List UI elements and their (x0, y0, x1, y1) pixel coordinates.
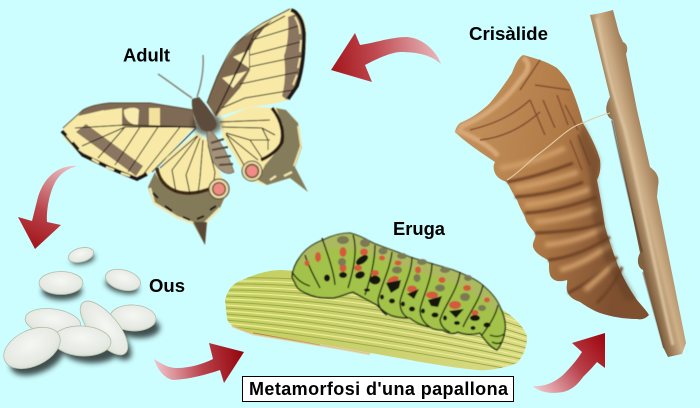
caption text: Metamorfosi d'una papallona (249, 379, 509, 399)
caterpillar grey spots (337, 236, 486, 311)
eggs (0, 245, 161, 382)
leaf (225, 270, 530, 373)
chrysalis cap streaks (470, 60, 590, 170)
egg: back right (109, 304, 157, 332)
egg: upper left (39, 272, 83, 294)
silk thread (507, 113, 610, 180)
egg: centre (52, 325, 112, 357)
caterpillar red spots (304, 247, 490, 316)
caterpillar (292, 233, 505, 350)
right forewing (207, 9, 306, 117)
egg shadows (5, 252, 161, 382)
chrysalis cap rim (459, 58, 528, 156)
arrow: eggs to caterpillar (154, 343, 244, 383)
chrysalis segment ridges (507, 163, 622, 303)
butterfly (62, 9, 308, 245)
body (192, 97, 234, 174)
left hindwing (148, 133, 229, 245)
arrow: caterpillar to chrysalis (533, 333, 605, 393)
egg: small top (67, 245, 95, 265)
arrow: chrysalis to adult (331, 33, 441, 82)
caterpillar black spots (324, 253, 490, 330)
caption box (242, 376, 514, 402)
caterpillar segment lines (292, 235, 504, 344)
caterpillar body (292, 233, 505, 350)
antennae (158, 55, 203, 98)
label: Adult: Adult (123, 46, 170, 66)
egg: tall (72, 294, 136, 362)
egg: upper right (103, 266, 143, 294)
chrysalis dark right shade (578, 123, 637, 300)
egg: large front (0, 319, 67, 377)
label: Crisàlide: Crisàlide (469, 24, 548, 44)
twig (590, 10, 686, 357)
egg: back left (23, 305, 83, 339)
caterpillar back shading (300, 233, 500, 312)
right hindwing (220, 107, 308, 192)
label: Ous: Ous (149, 276, 185, 296)
arrow: adult to eggs (18, 166, 77, 249)
left forewing (62, 103, 196, 180)
chrysalis (455, 55, 649, 319)
label: Eruga: Eruga (393, 219, 446, 239)
chrysalis segment highlights (500, 148, 615, 290)
